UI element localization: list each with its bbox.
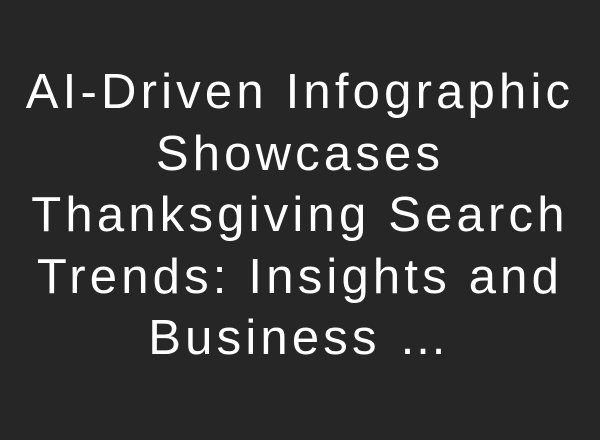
title: Business … [148,311,452,365]
title [26,65,574,365]
title: Trends: Insights and [37,250,563,304]
title: Thanksgiving Search [31,188,569,242]
title: AI-Driven Infographic [26,65,574,119]
title: Showcases [156,126,444,180]
